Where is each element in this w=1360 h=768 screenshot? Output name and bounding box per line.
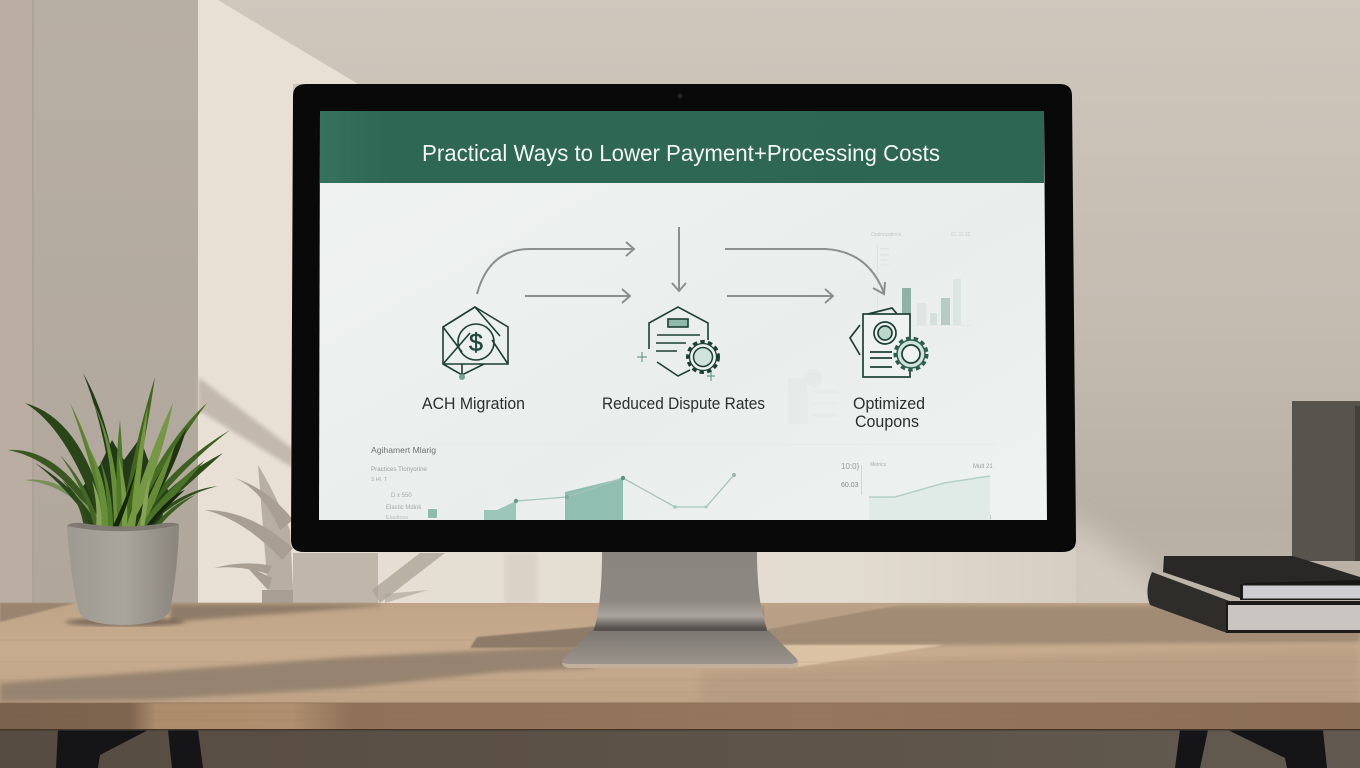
dashboard labels: Practices Tlonyorine — [371, 466, 427, 473]
right shaded desk — [760, 606, 1360, 648]
upper book — [1163, 556, 1360, 598]
label: Optimized Coupons: Optimized — [853, 395, 925, 413]
screen header band — [320, 111, 1044, 183]
monitor bezel — [291, 84, 1076, 552]
dashboard labels: 131 pt — [872, 515, 887, 521]
faint bar chart behind third icon: Optimizations — [871, 232, 902, 238]
dark box on the right — [1292, 401, 1360, 561]
right lower desk tone — [700, 646, 1360, 720]
webcam — [678, 94, 682, 98]
dashboard labels: 18.1 — [982, 515, 992, 521]
area chart — [484, 473, 736, 520]
pot shadow — [65, 618, 185, 626]
faint bar chart behind third icon: 01 31 32 — [951, 232, 971, 238]
faint chart behind centre — [788, 369, 838, 424]
plant shadow on wall — [205, 465, 445, 605]
label: ACH Migration: ACH Migration — [422, 395, 525, 413]
dashboard labels: 10:0} — [841, 462, 860, 471]
lower book — [1147, 572, 1232, 633]
icon: dispute document with gear — [637, 307, 718, 381]
underside area and desk legs — [0, 728, 1360, 768]
leaves — [8, 373, 230, 528]
arrow: down — [672, 227, 686, 291]
arrows — [477, 227, 885, 303]
dashboard labels: Elasticos — [386, 515, 408, 521]
pot — [67, 525, 179, 625]
icon: envelope with dollar coin: $ — [469, 329, 483, 357]
potted plant — [8, 373, 230, 626]
title: Practical Ways to Lower Payment+Processing Costs — [422, 140, 940, 166]
label: Reduced Dispute Rates: Reduced Dispute Rates — [602, 395, 765, 413]
monitor stand — [562, 552, 798, 668]
icon: envelope with dollar coin — [443, 307, 508, 380]
dashboard labels: Elastic Mdink — [386, 505, 422, 511]
dashboard labels: D x 550 — [391, 493, 412, 499]
arrow: curved top left — [477, 242, 634, 294]
mini area chart — [861, 465, 990, 520]
arrow: curved top right — [725, 249, 885, 294]
dashboard labels: 3 Hl. T — [371, 477, 388, 483]
label: Optimized Coupons: Coupons — [855, 413, 919, 431]
icon: coupon documents with gear — [850, 308, 927, 377]
pot rim — [67, 523, 179, 531]
arrow: middle left — [525, 289, 630, 303]
label: Optimized Coupons — [853, 395, 925, 431]
dashboard labels: Reduce Index — [872, 503, 909, 509]
main shadow band — [0, 645, 595, 702]
dashboard labels: 60.03 — [841, 482, 859, 489]
dashboard strip — [370, 444, 995, 521]
small green badge — [428, 509, 437, 518]
stack of books — [1147, 556, 1360, 633]
arrow: middle right — [727, 289, 833, 303]
wooden desk — [0, 603, 1360, 730]
monitor screen — [319, 111, 1047, 521]
dashboard labels: Agihamert Mlarig — [371, 446, 436, 455]
faint bar chart behind third icon — [871, 232, 972, 326]
dashboard labels: Metrics — [870, 462, 887, 468]
dashboard labels — [371, 446, 993, 521]
dashboard labels: Mult 21 — [973, 464, 993, 470]
